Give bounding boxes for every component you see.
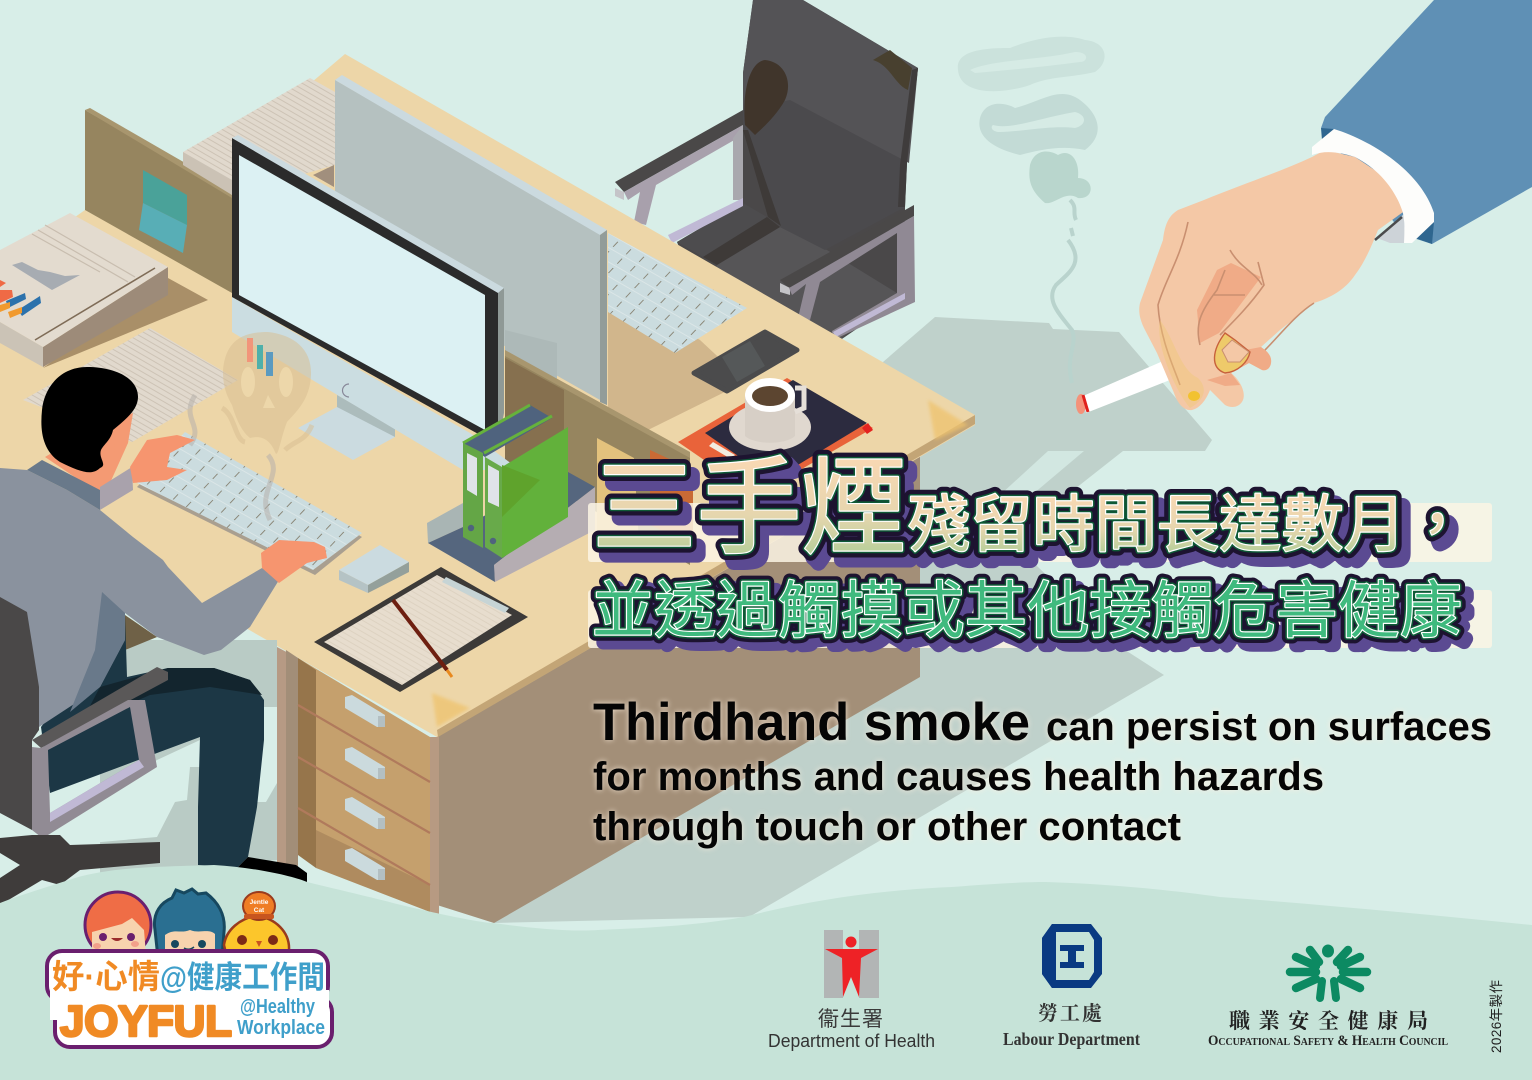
Labour Department logo [1003,924,1140,1049]
mascot: yellow chick with cap: Cat [254,907,265,914]
front monitor [232,135,520,470]
left hand [130,435,195,483]
desk right side panel [437,455,920,923]
yellow stains on desk [432,400,968,727]
title line 1: 三手煙 [592,450,906,568]
drawer handles [345,695,385,880]
Occupational Safety and Health Council logo: 職業安全健康局 [1229,1009,1428,1033]
desk front edge [437,415,975,737]
desk [0,54,975,923]
title line 1: 殘留時間長達數月， [908,491,1468,560]
neck and face [45,413,133,492]
right hand [261,540,327,583]
logo Healthy Workplace: @Healthy [240,996,316,1018]
Department of Health logo [768,930,935,1051]
shaded desk area [608,290,745,430]
production year: 2026年製作 [1489,980,1504,1053]
tray and binders [427,405,595,582]
shoe [237,857,307,882]
hand holding cigarette [1139,150,1406,410]
Joyful at Healthy Workplace logo [47,889,332,1047]
title line 1: 殘留時間長達數月， [916,500,1476,569]
English description: for months and causes health hazards [593,755,1324,799]
Labour Department logo: Labour Department [1003,1029,1140,1049]
bar chart [0,280,41,318]
hair [41,367,138,472]
sticker outline [47,951,332,1047]
title line 1: 三手煙 [592,450,906,568]
title line 1: 殘留時間長達數月， [908,491,1468,560]
office chair holding worker [0,597,168,905]
divider panel at left [85,108,232,293]
flat document [23,328,238,442]
seated office worker [0,367,327,882]
title line 1: 殘留時間長達數月， [908,491,1468,560]
sticky note [139,170,187,253]
phone [694,332,797,391]
smoke rising from cigarette [958,37,1105,383]
front keyboard [137,395,362,575]
Labour Department logo: 勞工處 [1038,1002,1104,1025]
English description: can persist on surfaces [1046,705,1492,749]
English description: through touch or other contact [593,805,1181,849]
clipboard with pencil [314,567,528,692]
title line 2: 並透過觸摸或其他接觸危害健康 [592,577,1462,646]
title line 2: 並透過觸摸或其他接觸危害健康 [600,585,1470,654]
colour tubes on monitor [247,338,273,376]
drawer unit [277,647,439,914]
mouse [339,545,409,593]
title line 1: 三手煙 [592,450,906,568]
books, cup and saucer [678,378,873,480]
partition under rear monitor [505,350,693,565]
English description: Thirdhand smoke [593,693,1030,752]
mascot: yellow chick with cap [224,892,289,962]
monitor stand [298,395,395,460]
Occupational Safety and Health Council logo: Occupational Safety & Health Council [1208,1033,1448,1049]
shirt [0,468,279,727]
title line 2: 並透過觸摸或其他接觸危害健康 [592,577,1462,646]
logo Healthy Workplace: Workplace [237,1017,325,1039]
front left paper stack with charts [0,213,208,368]
logo blue Chinese name: @健康工作間 [160,960,325,995]
bottom wave band [0,865,1532,1080]
paper stack behind monitor [183,78,335,195]
Department of Health logo: Department of Health [768,1031,935,1051]
English description [593,693,1492,849]
nicotine stains [1159,320,1250,408]
title line 2: 並透過觸摸或其他接觸危害健康 [592,577,1462,646]
rear monitor [335,75,607,405]
watch [1375,214,1405,243]
title line 1: 殘留時間長達數月， [908,491,1468,560]
cigarette [1076,347,1207,414]
trousers [41,615,264,868]
logo JOYFUL: JOYFUL [60,997,232,1046]
Chinese title [592,450,1476,654]
logo Healthy Workplace [237,996,325,1039]
title line 1: 三手煙 [600,459,914,577]
logo Chinese name: 好·心情 [52,958,160,995]
mascot: blue-haired boy [154,889,224,962]
collar [27,460,100,510]
mascot: yellow chick with cap: Jentle [250,899,269,906]
title line 1: 三手煙 [592,450,906,568]
desk shadow on floor [494,317,1212,923]
rear keyboard [608,233,747,353]
monitor screen [239,155,485,430]
office chair behind the desk [615,0,918,345]
Department of Health logo: 衞生署 [818,1008,884,1031]
Occupational Safety and Health Council logo [1208,944,1448,1049]
sleeve [1321,0,1532,244]
title line 2: 並透過觸摸或其他接觸危害健康 [592,577,1462,646]
floor under desk and legs [90,615,277,880]
beige bands behind title [588,503,1492,648]
title line 1 [592,450,1476,577]
chair base [0,835,160,905]
shirt cuff [1312,129,1434,243]
desk top [0,54,975,737]
skull made of smoke [222,332,312,454]
mascot: red-haired girl [85,892,151,958]
